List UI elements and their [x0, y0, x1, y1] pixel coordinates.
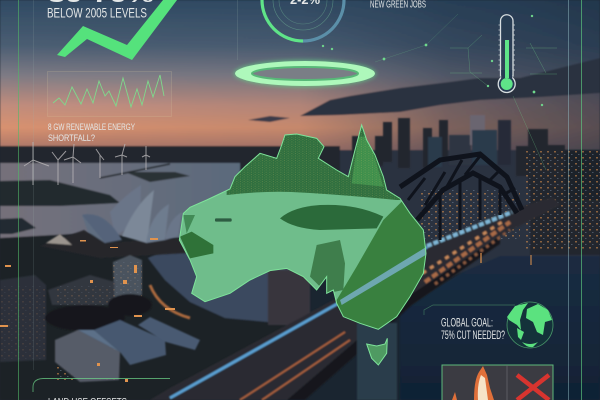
text: global goal	[441, 318, 505, 342]
city lights	[0, 238, 532, 382]
harbour bridge arch	[400, 154, 522, 240]
icon: globe	[507, 302, 553, 348]
icon: rising green arrow	[57, 0, 177, 60]
panel: global goal	[424, 302, 553, 348]
map outline	[179, 125, 426, 329]
text: renewable energy shortfall	[48, 122, 135, 144]
text: renewable energy shortfall: 8 GW RENEWABLE ENERGY	[48, 122, 135, 133]
text: global goal: 75% CUT NEEDED?	[441, 330, 505, 342]
opera house	[40, 185, 205, 258]
text: renewable energy shortfall: SHORTFALL?	[48, 133, 95, 144]
panel: fossil fuel with red cross	[442, 365, 553, 400]
city window lights	[0, 150, 600, 380]
Tasmania	[367, 338, 387, 365]
icon: flames	[452, 366, 494, 400]
icon: glowing green ring	[234, 60, 376, 87]
icon: thermometer	[498, 15, 515, 92]
map fill	[180, 127, 426, 329]
gauge: circular percentage ring	[262, 0, 344, 41]
line chart	[53, 75, 164, 107]
network lines and dots	[322, 14, 557, 170]
headline stat	[47, 0, 154, 20]
text: global goal: GLOBAL GOAL:	[441, 318, 493, 330]
panel: renewable line chart	[48, 72, 172, 116]
skyline	[352, 115, 600, 200]
map of Australia	[170, 120, 437, 365]
wind turbines	[24, 142, 150, 185]
subheading: BELOW 2005 LEVELS	[47, 4, 147, 20]
city buildings	[0, 255, 200, 382]
panel: land use offsets	[33, 378, 170, 400]
bridge pylon and road	[150, 197, 560, 400]
icon: red cross	[517, 375, 549, 400]
